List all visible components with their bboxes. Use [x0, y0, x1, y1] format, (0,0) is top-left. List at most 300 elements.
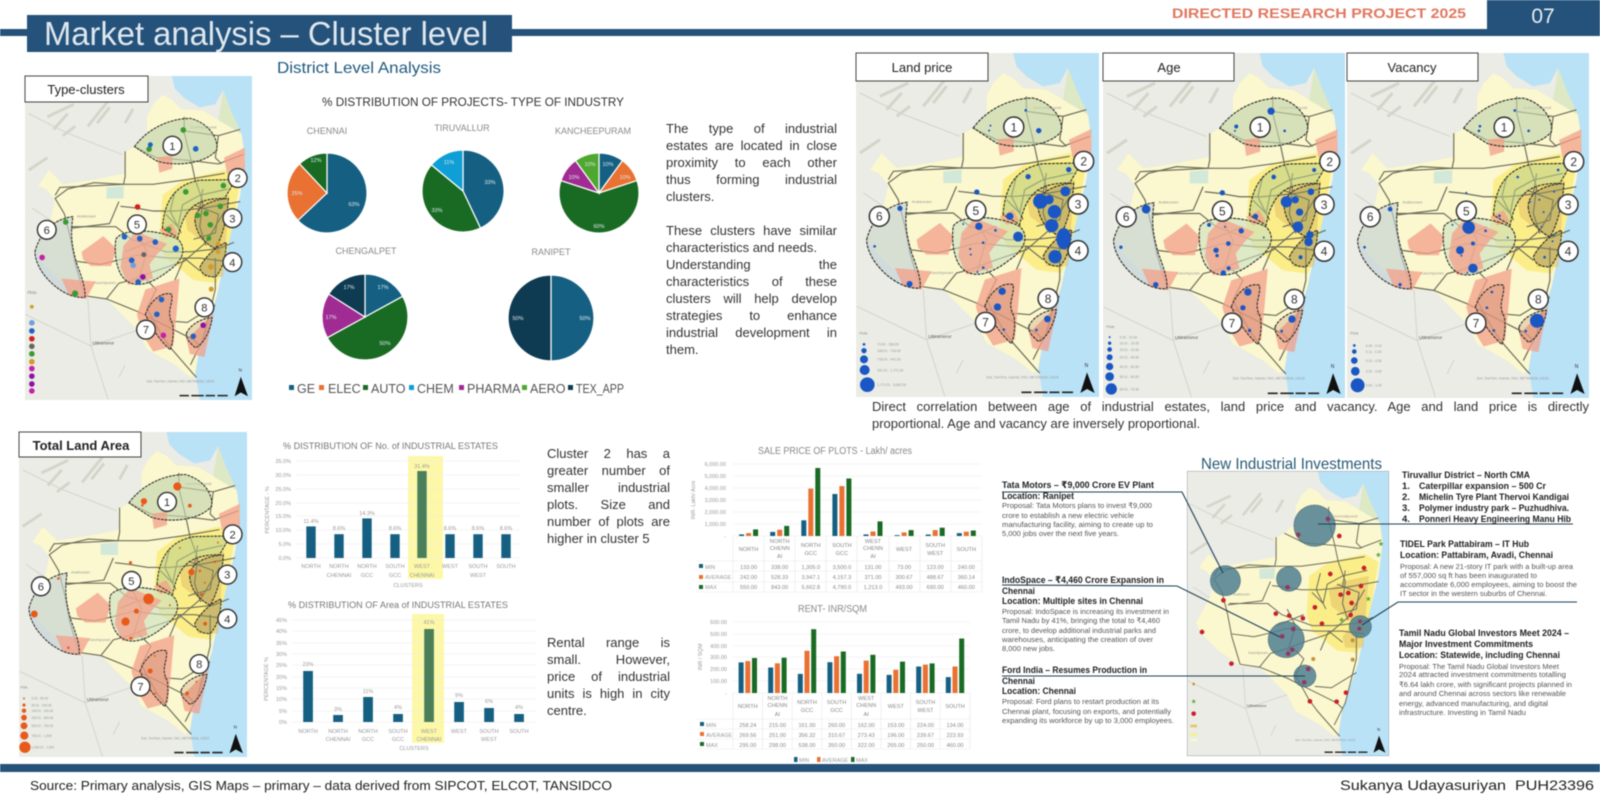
- bar chart: sale price of plots: CHENN: [770, 546, 790, 552]
- text block: rental note: centre.: [547, 703, 587, 718]
- bar chart: sale price of plots: SOUTH: [925, 543, 945, 549]
- bar chart: rent: 265.00: [887, 743, 904, 749]
- bar chart: rent: 134.00: [946, 723, 964, 729]
- markers: vacancy: [1363, 109, 1559, 332]
- cluster badges: [1116, 117, 1340, 333]
- bar chart: rent: NORTH: [768, 696, 787, 702]
- bar chart: sale price of plots: 360.14: [958, 575, 975, 581]
- bar chart: rent: AI: [864, 712, 869, 718]
- bar chart: sale price of plots: 4,157.3: [833, 575, 851, 581]
- legend: land price: 718.01 - 941.00: [877, 358, 901, 362]
- bar chart: rent: WEST: [858, 696, 875, 702]
- bar chart: sale price of plots: 2,000.00: [705, 510, 726, 516]
- bar chart: sale price of plots: 1,213.0: [864, 585, 882, 591]
- markers: total land area: [31, 482, 219, 695]
- bar chart: rent: GCC: [830, 708, 843, 714]
- pie: Ranipet: RANIPET: [531, 247, 571, 257]
- legend: total land area: Plots: [21, 686, 28, 690]
- bar chart: rent: 251.00: [769, 733, 786, 739]
- bar chart: rent: CHENN: [856, 703, 876, 709]
- bar chart: number of industrial estates: 8.6%: [444, 526, 456, 532]
- cluster badges: 2: [1326, 155, 1333, 169]
- text: Global Investors Meet: energy, advanced manufacturing, and digital: [1399, 699, 1548, 708]
- legend: sale and rent charts: MAX: [856, 758, 868, 764]
- bar chart: sale price of plots: SOUTH: [832, 543, 852, 549]
- cluster badges: 6: [876, 210, 883, 224]
- legend: land price: 338.01 - 718.00: [877, 349, 901, 353]
- text: Tata Motors: Proposal: Tata Motors plans to invest ₹9,000: [1002, 501, 1152, 510]
- bar chart: area of industrial estates: 3%: [334, 707, 342, 713]
- bar chart: number of industrial estates: GCC: [361, 573, 373, 579]
- bar chart: number of industrial estates: NORTH: [329, 564, 349, 570]
- connector arrows: [1002, 492, 1577, 676]
- bar chart: number of industrial estates: % DISTRIBUTION OF No. of INDUSTRIAL ESTATES: [283, 441, 498, 452]
- text block: cluster plots note: greater number of: [547, 463, 670, 478]
- bar chart: number of industrial estates: 8.6%: [472, 526, 484, 532]
- pie legend: TEX_APP: [576, 382, 624, 396]
- text: Tata Motors: 5,000 jobs over the next five years.: [1002, 529, 1119, 538]
- pie: Kancheepuram: 10%: [602, 162, 614, 168]
- cluster badges: 1: [1501, 121, 1508, 135]
- text: Tiruvallur District: 3.: [1402, 503, 1410, 514]
- page number: 07: [1531, 5, 1555, 28]
- bar chart: area of industrial estates: 40%: [276, 629, 287, 635]
- bar chart: sale price of plots: 528.33: [771, 575, 788, 581]
- text: Tiruvallur District: Michelin Tyre Plant Thervoi Kandigai: [1419, 492, 1569, 503]
- pie: Chengalpet: 17%: [343, 285, 355, 291]
- text block: correlation note: [872, 399, 1590, 432]
- pie: Chennai: 63%: [348, 202, 360, 208]
- bar chart: sale price of plots: WEST: [927, 551, 944, 557]
- bar chart: number of industrial estates: 30.0%: [275, 473, 291, 479]
- text block: rental note: small. However,: [547, 652, 670, 667]
- text block: cluster explanation: clusters will help develop: [666, 291, 837, 306]
- bar chart: area of industrial estates: 20%: [276, 675, 287, 681]
- pie: Ranipet: 50%: [579, 316, 591, 322]
- bar chart: number of industrial estates: 11.4%: [303, 519, 319, 525]
- bar chart: sale price of plots: 843.00: [771, 585, 788, 591]
- legend: sale and rent charts: [794, 757, 868, 764]
- cluster badges: 2: [235, 173, 241, 185]
- bar chart: sale price of plots: 5,662.8: [801, 585, 820, 591]
- label: type-clusters: [25, 76, 148, 102]
- bar chart: number of industrial estates: 10.0%: [275, 528, 291, 534]
- bar chart: number of industrial estates: NORTH: [357, 564, 377, 570]
- bar chart: area of industrial estates: PERCENTAGE %: [264, 657, 270, 701]
- bar chart: sale price of plots: 1,305.0: [801, 565, 820, 571]
- text: Ford India: Chennai: [1002, 676, 1035, 687]
- text: IndoSpace: Location: Multiple sites in Chennai: [1002, 596, 1143, 607]
- pie: Chengalpet: 17%: [325, 315, 337, 321]
- bar chart: rent: 400.00: [710, 644, 727, 650]
- text block: cluster explanation: These clusters have similar: [666, 223, 837, 238]
- pie: Tiruvallur: 33%: [431, 208, 443, 214]
- cluster badges: 5: [1463, 204, 1470, 218]
- text block: correlation note: Direct correlation between age of industrial estates, land price and vacancy. Age and land price is directly: [872, 399, 1589, 414]
- pie: Kancheepuram: [555, 126, 639, 233]
- cluster badges: [1360, 117, 1584, 333]
- text: Ford India: expanding its workforce by up to 3,000 employees.: [1002, 716, 1174, 725]
- text: IndoSpace: Chennai: [1002, 586, 1035, 597]
- bar chart: rent: CHENN: [767, 703, 787, 709]
- text block: cluster explanation: them.: [666, 342, 699, 357]
- text block: cluster plots note: plots. Size and: [547, 497, 670, 512]
- cluster badges: 5: [973, 204, 979, 218]
- text: Ford India: Chennai plant, focusing on exports, and potentially: [1002, 707, 1171, 716]
- pie: Chennai: 12%: [310, 158, 322, 164]
- bar chart: rent: INR / SQM: [698, 643, 704, 670]
- text: Tiruvallur District: 1.: [1402, 481, 1410, 492]
- cluster badges: 1: [164, 497, 170, 509]
- panel: type-clusters map: [25, 76, 252, 400]
- bar chart: number of industrial estates: 0.0%: [278, 556, 291, 562]
- bar chart: area of industrial estates: 0%: [279, 720, 287, 726]
- text: Tiruvallur District: [1402, 470, 1571, 525]
- text: IndoSpace: warehouses, anticipating the creation of over: [1001, 635, 1153, 644]
- cluster badges: 2: [1080, 155, 1087, 169]
- label: age: Age: [1157, 60, 1181, 75]
- bar chart: sale price of plots: 690.00: [927, 585, 944, 591]
- text: Tiruvallur District: Ponneri Heavy Engineering Manu Hib: [1419, 514, 1571, 525]
- cluster badges: 7: [1473, 316, 1480, 330]
- text: Tata Motors: Tata Motors – ₹9,000 Crore EV Plant: [1002, 480, 1155, 491]
- bar chart: rent: 239.67: [917, 733, 934, 739]
- cluster badges: [869, 117, 1094, 332]
- bar chart: sale price of plots: AI: [777, 554, 783, 560]
- project heading: DIRECTED RESEARCH PROJECT 2025: [1172, 6, 1467, 21]
- bar chart: rent: 460.00: [946, 743, 964, 749]
- cluster badges: 6: [1123, 210, 1130, 224]
- pie legend: [289, 382, 624, 396]
- text block: cluster explanation: industrial development in: [666, 325, 837, 340]
- text: Global Investors Meet: Tamil Nadu Global Investors Meet 2024 –: [1399, 628, 1569, 639]
- bar chart: number of industrial estates: PERCENTAGE - %: [265, 486, 271, 534]
- bar chart: rent: AI: [775, 712, 780, 718]
- label: land price: [856, 53, 988, 81]
- pie legend: ELEC: [328, 382, 361, 396]
- bar chart: area of industrial estates: CHENNAI: [417, 737, 442, 743]
- markers: industry type: [39, 127, 226, 339]
- pie legend: AUTO: [371, 382, 406, 396]
- cluster badges: 2: [230, 529, 236, 541]
- text: IndoSpace: 8,000 new jobs.: [1002, 644, 1055, 653]
- text: Global Investors Meet: Proposal: The Tamil Nadu Global Investors Meet: [1399, 662, 1560, 671]
- bar chart: number of industrial estates: CHENNAI: [327, 573, 352, 579]
- legend: age: 50.01 - 60.00: [1120, 375, 1139, 379]
- bar chart: number of industrial estates: SOUTH: [385, 564, 405, 570]
- text block: cluster plots note: higher in cluster 5: [547, 531, 650, 546]
- bar chart: area of industrial estates: 9%: [455, 693, 463, 699]
- legend: total land area: 5.00 - 50.00: [31, 697, 48, 701]
- pie: Tiruvallur: 11%: [444, 160, 454, 166]
- bar chart: area of industrial estates: NORTH: [328, 729, 348, 735]
- bar chart: rent: MAX: [706, 743, 718, 749]
- bar chart: sale price of plots: CHENN: [863, 546, 883, 552]
- cluster badges: 6: [38, 581, 44, 593]
- text: Tata Motors: [1002, 480, 1155, 538]
- heading: new industrial investments: New Industrial Investments: [1201, 456, 1382, 473]
- pie: Tiruvallur: [422, 123, 504, 232]
- legend: type-clusters: [27, 290, 36, 394]
- cluster badges: 5: [128, 576, 135, 588]
- text: Ford India: Location: Chennai: [1002, 686, 1076, 697]
- text: Tiruvallur District: 2.: [1402, 492, 1410, 503]
- bar chart: number of industrial estates: WEST: [414, 564, 431, 570]
- heading: district level analysis: District Level Analysis: [277, 60, 441, 77]
- cluster badges: 4: [224, 614, 230, 626]
- cluster badges: 7: [1229, 316, 1236, 330]
- bar chart: rent: 223.93: [946, 733, 964, 739]
- cluster badges: 5: [134, 220, 140, 232]
- bar chart: rent: SOUTH: [916, 700, 935, 706]
- cluster badges: 8: [1291, 293, 1298, 307]
- bar chart: number of industrial estates: 8.6%: [500, 526, 512, 532]
- cluster badges: 8: [201, 302, 208, 314]
- cluster badges: 2: [1570, 155, 1577, 169]
- legend: land price: Plots: [859, 332, 868, 336]
- text: TIDEL Park: of 557,000 sq ft has been inaugurated to: [1400, 571, 1537, 580]
- bar chart: area of industrial estates: CHENNAI: [326, 737, 351, 743]
- bar chart: area of industrial estates: 6%: [485, 699, 493, 705]
- text block: cluster plots note: Cluster 2 has a: [547, 446, 670, 461]
- label: vacancy: Vacancy: [1388, 60, 1437, 75]
- bar chart: rent: 250.00: [917, 743, 934, 749]
- text: TIDEL Park: TIDEL Park Pattabiram – IT Hub: [1400, 539, 1529, 550]
- bar chart: rent: 538.00: [798, 743, 816, 749]
- text block: rental note: units is high in city: [547, 686, 670, 701]
- bar chart: sale price of plots: 133.00: [740, 565, 757, 571]
- legend: total land area: 1,000.01 - 1,500: [31, 745, 54, 750]
- pie: Kancheepuram: 60%: [593, 224, 605, 230]
- markers: land price: [873, 109, 1071, 331]
- bar chart: rent: 356.32: [798, 733, 816, 739]
- bar chart: number of industrial estates: CHENNAI: [410, 573, 435, 579]
- bar chart: area of industrial estates: 41%: [423, 620, 435, 626]
- bar chart: number of industrial estates: WEST: [442, 564, 459, 570]
- legend: vacancy: [1350, 331, 1382, 392]
- bar chart: sale price of plots: SALE PRICE OF PLOTS - Lakh/ acres: [758, 446, 912, 457]
- bar chart: area of industrial estates: 15%: [276, 686, 287, 692]
- pie: Chennai: 25%: [291, 191, 303, 197]
- legend: total land area: 50.01 - 100.00: [31, 703, 52, 707]
- text: Tata Motors: Location: Ranipet: [1002, 491, 1075, 502]
- pie legend: AERO: [530, 382, 566, 396]
- bar chart: area of industrial estates: 10%: [276, 697, 287, 703]
- bar chart: sale price of plots: 131.00: [864, 565, 882, 571]
- cluster badges: 5: [1219, 204, 1226, 218]
- text block: cluster plots note: [546, 446, 671, 546]
- pie legend: PHARMA: [467, 382, 521, 396]
- text block: cluster explanation: characteristics of these: [666, 274, 837, 289]
- bar chart: rent: 153.00: [887, 723, 904, 729]
- bar chart: area of industrial estates: 25%: [276, 663, 287, 669]
- bar chart: area of industrial estates: WEST: [451, 729, 468, 735]
- bar chart: sale price of plots: 123.00: [927, 565, 944, 571]
- bar chart: sale price of plots: NORTH: [770, 539, 790, 545]
- text block: cluster explanation: [666, 121, 838, 357]
- bar chart: rent: 258.24: [739, 723, 756, 729]
- bar chart: sale price of plots: 3,500.0: [833, 565, 851, 571]
- panel: investments map: [1186, 470, 1390, 757]
- text: Tiruvallur District: 4.: [1402, 514, 1410, 525]
- bar chart: sale price of plots: NORTH: [801, 543, 821, 549]
- bar chart: rent: 161.00: [798, 723, 816, 729]
- bar chart: rent: 224.00: [917, 723, 934, 729]
- legend: age: 15.01 - 20.00: [1120, 348, 1139, 352]
- bar chart: number of industrial estates: WEST: [470, 573, 487, 579]
- bar chart: area of industrial estates: % DISTRIBUTION OF Area of INDUSTRIAL ESTATES: [288, 600, 508, 611]
- bar chart: area of industrial estates: 5%: [279, 709, 287, 715]
- bar chart: rent: [697, 604, 970, 749]
- bar chart: rent: 273.43: [858, 733, 875, 739]
- bar chart: sale price of plots: SOUTH: [957, 547, 976, 553]
- author credit: Sukanya Udayasuriyan PUH23396: [1340, 777, 1594, 793]
- text block: cluster explanation: thus forming industrial: [666, 172, 837, 187]
- legend: age: 60.01 - 70.00: [1120, 387, 1139, 391]
- text: Global Investors Meet: Location: Statewide, including Chennai: [1399, 650, 1560, 661]
- bar chart: number of industrial estates: 25.0%: [275, 487, 291, 493]
- text: Global Investors Meet: [1399, 628, 1572, 717]
- bar chart: area of industrial estates: GCC: [392, 737, 404, 743]
- text: Global Investors Meet: 2024 attracted investment commitments totalling: [1399, 670, 1566, 679]
- title band: Market analysis – Cluster level: [44, 15, 488, 52]
- pie: Chengalpet: 17%: [377, 285, 389, 291]
- bar chart: area of industrial estates: 45%: [276, 618, 287, 624]
- pie: Kancheepuram: 10%: [584, 162, 596, 168]
- bar chart: rent: 298.00: [769, 743, 786, 749]
- cluster badges: 3: [224, 570, 230, 582]
- bar chart: rent: 500.00: [710, 632, 727, 638]
- bar chart: rent: 215.00: [769, 723, 786, 729]
- bar chart: area of industrial estates: 35%: [276, 641, 287, 647]
- legend: total land area: 100.01 - 200.00: [31, 709, 54, 713]
- bar chart: sale price of plots: [691, 446, 982, 592]
- bar chart: number of industrial estates: GCC: [389, 573, 401, 579]
- cluster badges: 3: [1321, 198, 1328, 212]
- cluster badges: 8: [1045, 292, 1052, 306]
- text: IndoSpace: Proposal: IndoSpace is increasing its investment in: [1002, 607, 1169, 616]
- bar chart: sale price of plots: -: [724, 534, 726, 540]
- text: Global Investors Meet: and around Chennai across sectors like renewable: [1399, 689, 1566, 698]
- bar chart: number of industrial estates: 15.0%: [275, 514, 291, 520]
- legend: vacancy: 0.51 - 0.80: [1366, 370, 1382, 374]
- bar chart: rent: 295.00: [739, 743, 756, 749]
- cluster badges: 8: [196, 659, 202, 671]
- text: IndoSpace: Tamil Nadu by 41%, bringing the total to ₹4,460: [1002, 616, 1160, 625]
- legend: land price: 73.00 - 338.00: [877, 343, 899, 347]
- legend: age: [1105, 325, 1139, 395]
- legend: total land area: 500.01 - 700.00: [31, 724, 54, 728]
- pie: Kancheepuram: 10%: [568, 175, 580, 181]
- pie: Kancheepuram: KANCHEEPURAM: [555, 126, 631, 136]
- bar chart: area of industrial estates: WEST: [421, 729, 438, 735]
- cluster badges: 4: [1321, 245, 1328, 259]
- bar chart: rent: 100.00: [710, 679, 727, 685]
- legend: age: Plots: [1106, 325, 1115, 329]
- cluster badges: 3: [1075, 197, 1082, 211]
- bar chart: number of industrial estates: SOUTH: [468, 564, 488, 570]
- source note: Source: Primary analysis, GIS Maps – primary – data derived from SIPCOT, ELCOT, TANSIDCO: [30, 778, 612, 793]
- pie: Chengalpet: 50%: [379, 341, 391, 347]
- label: total land area: [19, 432, 141, 457]
- bar chart: rent: WEST: [888, 704, 904, 710]
- bar chart: sale price of plots: 4,790.0: [833, 585, 851, 591]
- bar chart: area of industrial estates: SOUTH: [509, 729, 529, 735]
- bar chart: sale price of plots: 338.00: [771, 565, 788, 571]
- bar chart: rent: AVERAGE: [706, 733, 733, 739]
- text: IndoSpace: crore, to develop additional industrial parks and: [1002, 626, 1156, 635]
- bar chart: rent: 322.00: [858, 743, 875, 749]
- bar chart: sale price of plots: AI: [870, 554, 876, 560]
- page number: [1487, 0, 1600, 36]
- text: Global Investors Meet: Major Investment Commitments: [1399, 639, 1533, 650]
- text: Global Investors Meet: infrastructure. Investing in Tamil Nadu: [1399, 708, 1526, 717]
- text: Tiruvallur District: Caterpillar expansion – 500 Cr: [1419, 481, 1546, 492]
- bar chart: sale price of plots: GCC: [805, 551, 817, 557]
- cluster badges: 4: [229, 257, 236, 269]
- text: Ford India: [1002, 665, 1174, 725]
- text: TIDEL Park: accommodate 6,000 employees, aiming to boost the: [1400, 580, 1577, 589]
- bar chart: number of industrial estates: 14.3%: [359, 511, 375, 517]
- bar chart: area of industrial estates: 11%: [363, 689, 373, 695]
- cluster badges: 7: [143, 325, 149, 337]
- legend: age: 40.01 - 50.00: [1120, 365, 1139, 369]
- cluster badges: 1: [1257, 121, 1264, 135]
- panel: land price map: [856, 53, 1099, 397]
- legend: vacancy: 0.00 - 0.10: [1366, 344, 1382, 348]
- pie: Ranipet: 50%: [512, 316, 524, 322]
- text: IndoSpace: IndoSpace – ₹4,460 Crore Expansion in: [1002, 575, 1164, 586]
- pie: Chengalpet: [322, 246, 408, 360]
- text block: cluster explanation: proximity to each other: [666, 155, 837, 170]
- bar chart: rent: NORTH: [797, 700, 817, 706]
- bar chart: area of industrial estates: 4%: [515, 705, 523, 711]
- bar chart: rent: SOUTH: [827, 700, 846, 706]
- text: TIDEL Park: [1400, 539, 1577, 598]
- bar chart: rent: 260.00: [828, 723, 845, 729]
- markers: investment hotspots: [1200, 505, 1384, 704]
- bar chart: sale price of plots: 73.00: [897, 565, 911, 571]
- text block: rental note: [546, 635, 670, 718]
- label: vacancy: [1347, 53, 1478, 81]
- bar chart: number of industrial estates: 5.0%: [278, 542, 291, 548]
- label: land price: Land price: [892, 60, 952, 75]
- bar chart: sale price of plots: 240.00: [958, 565, 975, 571]
- pie: Chennai: [287, 126, 367, 233]
- legend: total land area: 200.01 - 500.00: [31, 716, 54, 720]
- bar chart: sale price of plots: MAX: [705, 585, 717, 591]
- cluster badges: 6: [1367, 210, 1374, 224]
- cluster badges: 3: [229, 213, 236, 225]
- bar chart: rent: -: [725, 691, 727, 697]
- pie: Tiruvallur: 33%: [484, 180, 496, 186]
- bar chart: area of industrial estates: CLUSTERS: [399, 746, 429, 752]
- bar chart: sale price of plots: 5,000.00: [705, 474, 726, 480]
- bar chart: sale price of plots: 1,000.00: [705, 522, 726, 528]
- bar chart: sale price of plots: 550.00: [740, 585, 757, 591]
- bar chart: area of industrial estates: 30%: [276, 652, 287, 658]
- label: age: [1103, 53, 1234, 81]
- bar chart: number of industrial estates: CLUSTERS: [393, 583, 423, 589]
- bar chart: sale price of plots: 460.00: [958, 585, 975, 591]
- bar chart: number of industrial estates: 20.0%: [275, 501, 291, 507]
- bar chart: sale price of plots: 4,000.00: [705, 486, 726, 492]
- bar chart: number of industrial estates: 31.4%: [414, 464, 430, 470]
- bar chart: sale price of plots: AVERAGE: [705, 575, 732, 581]
- cluster badges: 7: [982, 316, 989, 330]
- bar chart: area of industrial estates: NORTH: [358, 729, 378, 735]
- legend: age: 20.01 - 40.00: [1120, 356, 1139, 360]
